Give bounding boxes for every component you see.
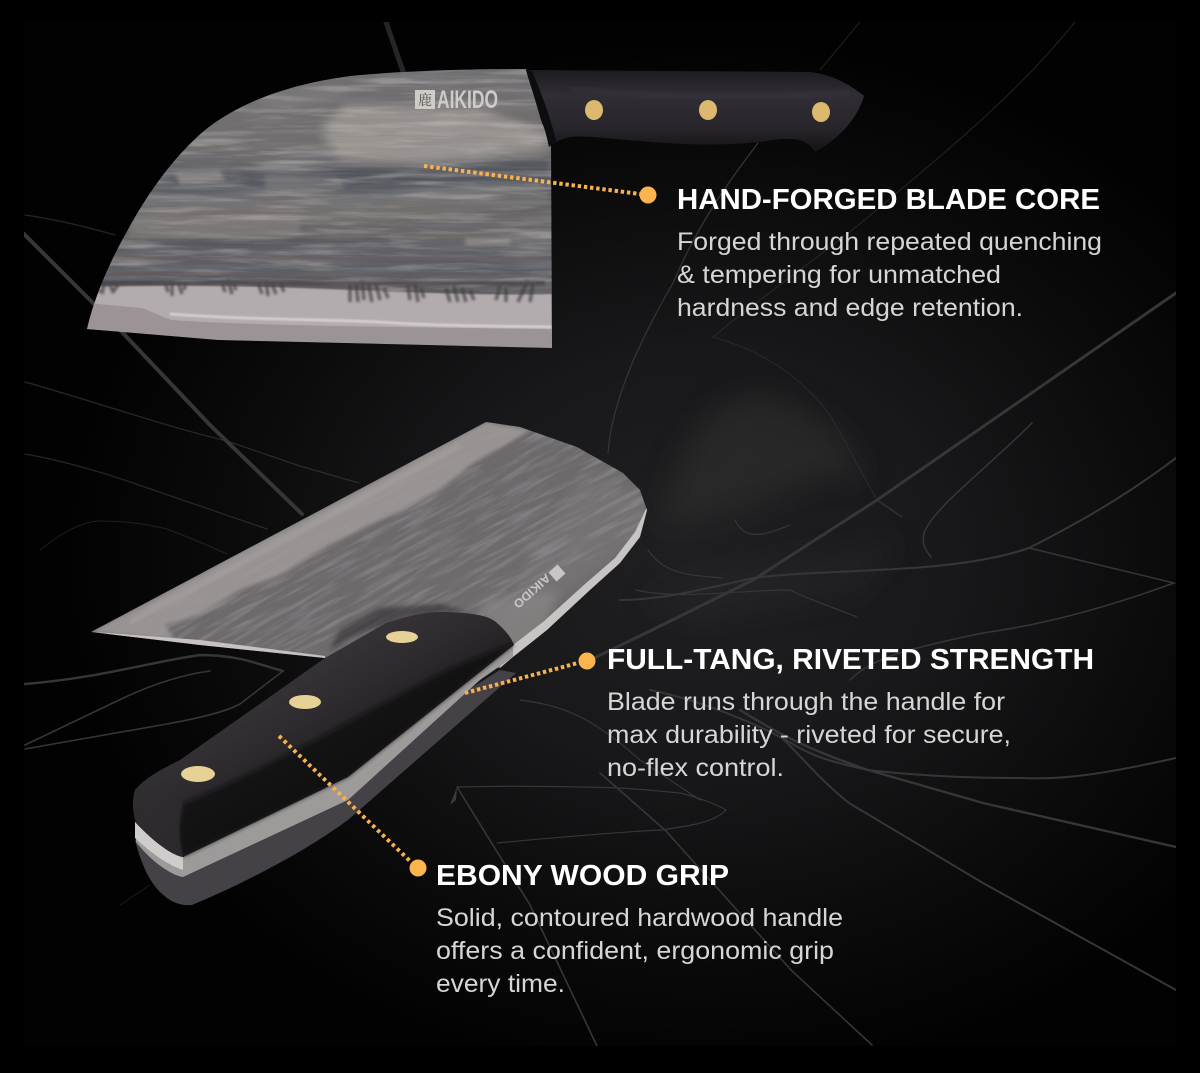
callout: ebony wood grip <box>279 736 843 998</box>
edge zone <box>88 285 552 332</box>
handle 2 <box>133 612 514 857</box>
logo 1: AIKIDO <box>437 86 498 114</box>
marker dot <box>410 860 426 876</box>
description: hardness and edge retention. <box>677 294 1023 322</box>
logo 2 <box>511 565 565 611</box>
rivet <box>289 695 321 709</box>
description: Blade runs through the handle for <box>607 688 1005 716</box>
leader line <box>465 663 578 693</box>
handle 1 <box>526 70 864 152</box>
bevel <box>87 303 552 348</box>
description: offers a confident, ergonomic grip <box>436 937 834 965</box>
blade rim highlight <box>500 507 647 668</box>
description: Forged through repeated quenching <box>677 228 1102 256</box>
logo 2: AIKIDO <box>511 571 553 611</box>
marker dot <box>640 186 656 204</box>
steel tang strip <box>135 640 513 877</box>
knife 1: side view <box>80 60 864 355</box>
blade 1 <box>80 60 560 355</box>
rivet <box>585 100 603 120</box>
description: every time. <box>436 970 565 998</box>
spine highlight band <box>91 422 530 640</box>
logo 1 <box>415 86 498 114</box>
rivet <box>386 631 418 643</box>
rivet <box>181 766 215 782</box>
blade 2 <box>91 422 647 668</box>
description: max durability - riveted for secure, <box>607 721 1011 749</box>
leader line <box>424 166 640 194</box>
leader line <box>279 736 411 862</box>
heading: HAND-FORGED BLADE CORE <box>677 184 1100 216</box>
description <box>677 228 1102 322</box>
callout: hand-forged blade core <box>424 166 1102 322</box>
description: Solid, contoured hardwood handle <box>436 904 843 932</box>
description: no-flex control. <box>607 754 784 782</box>
description <box>436 904 843 998</box>
marker dot <box>578 652 596 670</box>
callout: full-tang riveted strength <box>465 644 1094 782</box>
hamon temper line <box>94 280 545 302</box>
heading: FULL-TANG, RIVETED STRENGTH <box>607 644 1094 676</box>
rivet <box>699 100 717 120</box>
heading: EBONY WOOD GRIP <box>436 860 729 892</box>
logo 1: 鹿 <box>418 93 432 109</box>
description <box>607 688 1011 782</box>
description: & tempering for unmatched <box>677 261 1001 289</box>
lower blade underside <box>135 670 516 905</box>
knife 2: angled view <box>22 279 718 905</box>
rivet <box>812 102 830 122</box>
